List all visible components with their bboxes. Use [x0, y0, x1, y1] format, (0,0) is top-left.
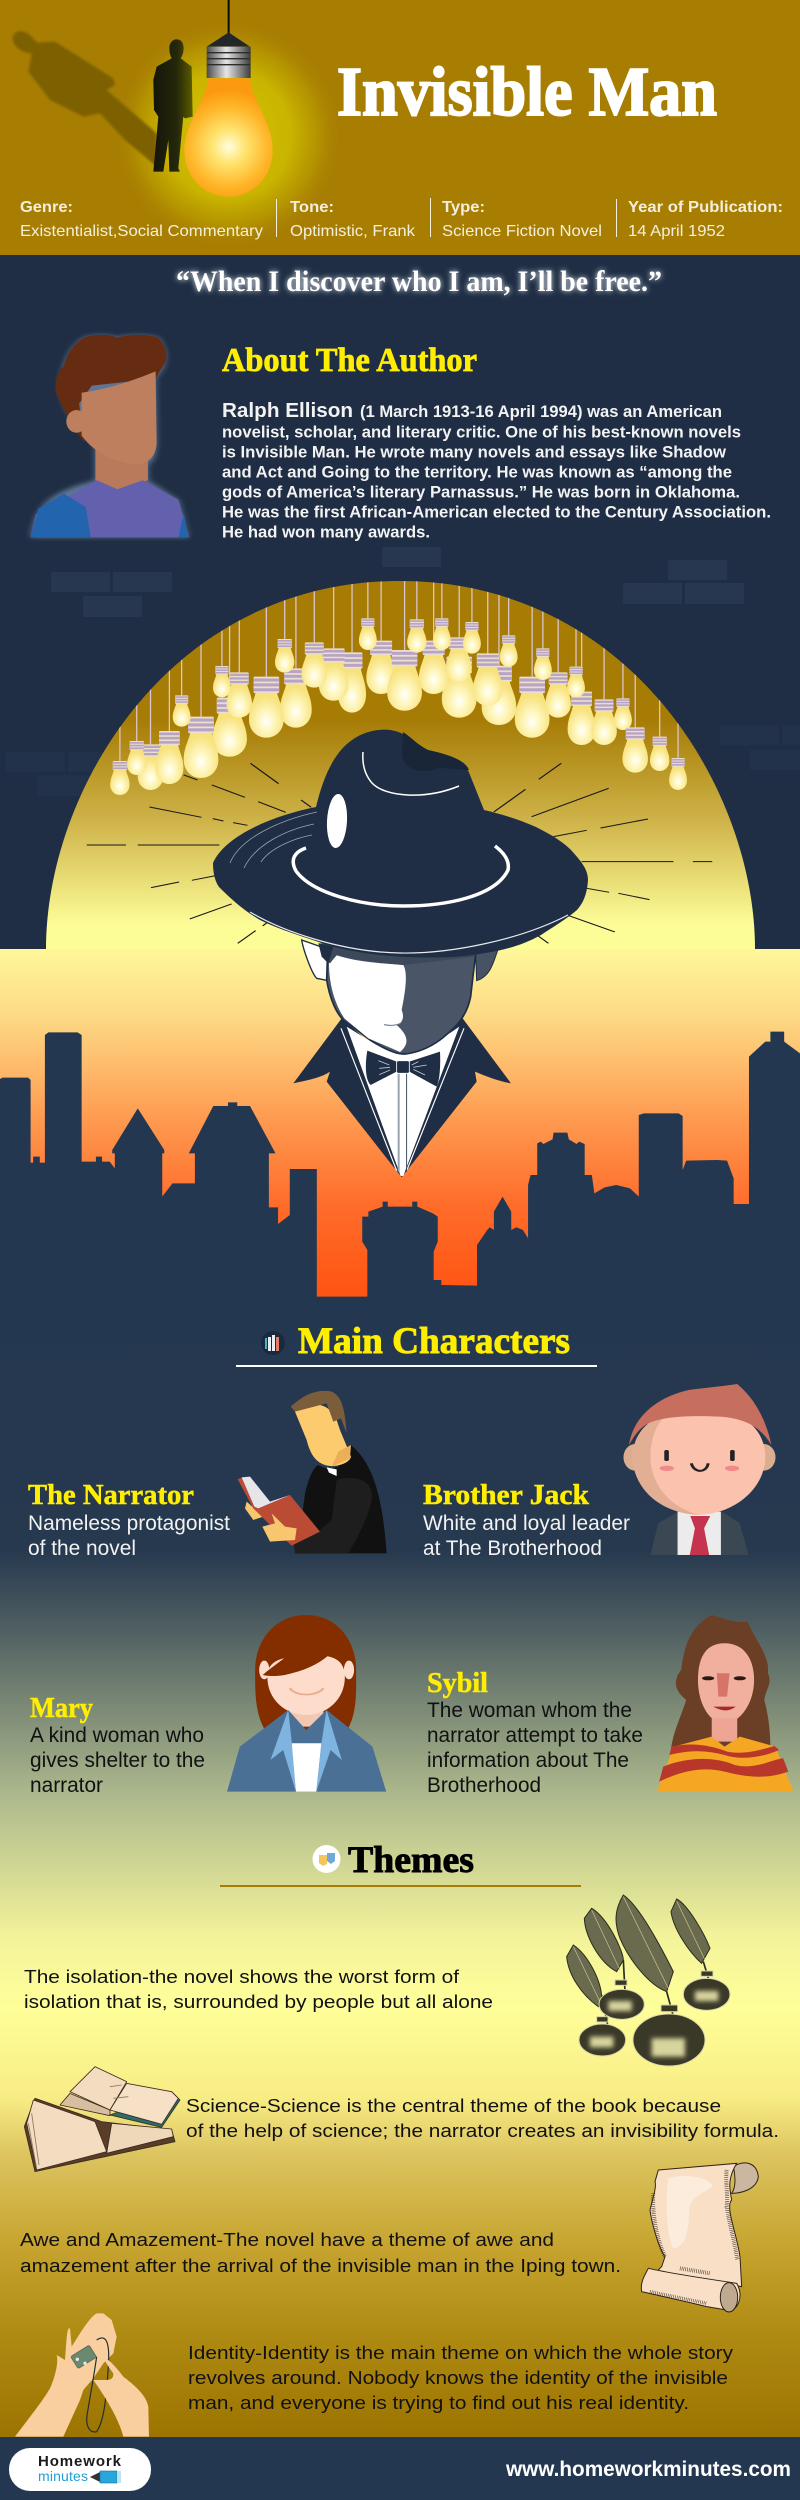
man's head and suit — [293, 940, 511, 1177]
author biography text: is Invisible Man. He wrote many novels and essays like Shadow — [222, 444, 726, 462]
website url: www.homeworkminutes.com — [505, 2457, 791, 2481]
icon: standing man silhouette — [153, 39, 193, 172]
radiating light rays — [87, 763, 712, 943]
icon: parchment scroll — [641, 2163, 758, 2312]
ears — [302, 940, 330, 981]
character: the narrator text: of the novel — [28, 1537, 136, 1560]
book facts row: Type: — [442, 199, 485, 216]
man in suit with hat — [87, 730, 712, 1177]
icon: hanging light bulb — [184, 0, 273, 197]
heading: themes — [220, 1840, 581, 1887]
illuminated arch with hanging bulbs — [46, 560, 755, 949]
author biography text: and Act and Going to the territory. He was known as “among the — [222, 464, 732, 482]
character: sybil text — [427, 1667, 643, 1797]
heading: themes: Themes — [348, 1840, 474, 1881]
theme: science text: of the help of science; the narrator creates an invisibility formula. — [186, 2120, 779, 2141]
author biography text: Ralph Ellison — [222, 400, 353, 422]
theme: science text: Science-Science is the central theme of the book because — [186, 2095, 721, 2116]
heading: about the author: About The Author — [222, 342, 477, 379]
author biography text: He was the first African-American elected to the Century Association. — [222, 504, 771, 522]
face — [327, 950, 476, 1054]
theme: identity text: Identity-Identity is the main theme on which the whole story — [188, 2342, 734, 2363]
theme: awe and amazement text: amazement after the arrival of the invisible man in the Iping town. — [20, 2255, 621, 2276]
theme: science text — [186, 2095, 779, 2141]
theme: isolation text — [24, 1966, 493, 2012]
book facts row: 14 April 1952 — [628, 223, 725, 240]
lower page gradient background — [0, 1320, 800, 2440]
theme: awe and amazement text — [20, 2229, 621, 2276]
bow tie — [366, 1051, 440, 1087]
book facts row: Year of Publication: — [628, 199, 783, 216]
icon: mary portrait — [227, 1615, 386, 1792]
heading: main characters: Main Characters — [298, 1321, 570, 1362]
character: sybil text: Brotherhood — [427, 1774, 541, 1797]
book facts row: Existentialist,Social Commentary — [20, 223, 263, 240]
icon: author portrait — [31, 335, 189, 537]
icon: sybil portrait — [657, 1615, 793, 1792]
author biography text: (1 March 1913-16 April 1994) was an American — [360, 403, 722, 421]
character: sybil text: information about The — [427, 1749, 629, 1772]
theme: isolation text: isolation that is, surrounded by people but all alone — [24, 1991, 493, 2012]
header banner — [0, 0, 800, 255]
character: brother jack text: Brother Jack — [423, 1479, 590, 1511]
section: main characters — [28, 1321, 793, 1797]
shirt — [347, 1027, 459, 1176]
character: mary text: A kind woman who — [30, 1724, 204, 1747]
page background: navy upper section — [0, 255, 800, 955]
author biography text — [222, 400, 771, 542]
icon: brother jack portrait — [623, 1384, 776, 1555]
book facts row: Genre: — [20, 199, 73, 216]
character: brother jack text: White and loyal leader — [423, 1512, 630, 1535]
theme: identity text: revolves around. Nobody knows the identity of the invisible — [188, 2367, 728, 2388]
character: brother jack text: at The Brotherhood — [423, 1537, 602, 1560]
icon: open books — [24, 2067, 180, 2172]
quote: “When I discover who I am, I’ll be free.” — [176, 265, 662, 298]
section: themes — [15, 1840, 779, 2437]
quote: “When I discover who I am, I’ll be free.” — [176, 265, 662, 298]
theme: identity text — [188, 2342, 734, 2413]
book facts row: Optimistic, Frank — [290, 223, 416, 240]
character: sybil text: narrator attempt to take — [427, 1724, 643, 1747]
character: mary text: gives shelter to the — [30, 1749, 205, 1772]
panel: about the author — [222, 342, 771, 542]
icon: quills and inkwells — [567, 1895, 730, 2066]
book facts row: Tone: — [290, 199, 334, 216]
theme: awe and amazement text: Awe and Amazement-The novel have a theme of awe and — [20, 2229, 554, 2250]
sky gradient band — [0, 949, 800, 1324]
black hat — [213, 730, 588, 958]
city skyline silhouette — [0, 1032, 800, 1320]
character: brother jack text — [423, 1479, 630, 1560]
jacket — [293, 1018, 511, 1177]
logo: homework minutes — [9, 2448, 151, 2491]
character: the narrator text: The Narrator — [28, 1479, 194, 1511]
author biography text: gods of America’s literary Parnassus.” He was born in Oklahoma. — [222, 484, 740, 502]
character: the narrator text — [28, 1479, 230, 1560]
author biography text: novelist, scholar, and literary critic. One of his best-known novels — [222, 424, 741, 442]
icon: hands holding identity tag — [15, 2313, 149, 2437]
character: the narrator text: Nameless protagonist — [28, 1512, 230, 1535]
book facts row — [20, 198, 783, 240]
character: mary text: Mary — [30, 1692, 93, 1724]
logo: homework minutes: Homework — [38, 2453, 122, 2470]
character: mary text: narrator — [30, 1774, 103, 1797]
book facts row: Science Fiction Novel — [442, 223, 602, 240]
character: sybil text: Sybil — [427, 1667, 488, 1699]
character: mary text — [30, 1692, 205, 1797]
logo: homework minutes: minutes — [38, 2468, 88, 2484]
brick wall patches — [6, 547, 800, 796]
hanging lightbulbs — [110, 560, 687, 795]
title: Invisible Man — [337, 54, 717, 131]
heading: main characters — [236, 1321, 597, 1367]
character: sybil text: The woman whom the — [427, 1699, 632, 1722]
theme: isolation text: The isolation-the novel shows the worst form of — [24, 1966, 460, 1987]
footer bar — [0, 2437, 800, 2500]
theme: identity text: man, and everyone is trying to find out his real identity. — [188, 2392, 689, 2413]
icon: man's cast shadow — [13, 31, 157, 167]
icon: narrator reading a book — [238, 1391, 387, 1553]
author biography text: He had won many awards. — [222, 524, 430, 542]
